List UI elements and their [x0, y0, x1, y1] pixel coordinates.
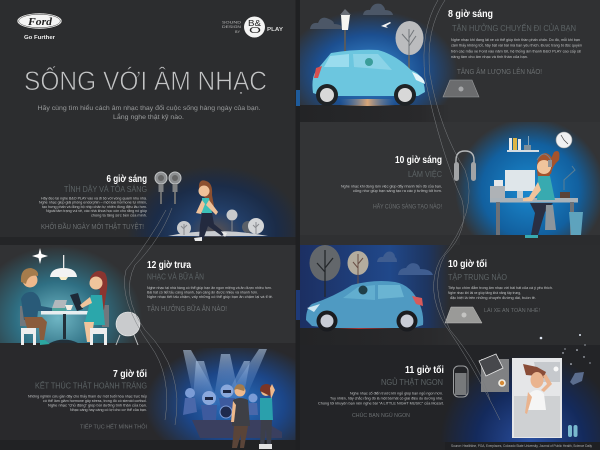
curved sound lines: [124, 0, 500, 425]
icon: clouds: [310, 4, 393, 29]
body text: 10 pm: Tiếp tục chìm đắm trong âm nhạc với bài hát của cá ý yêu thích.: [448, 285, 553, 290]
call to action: 7 pm: TIẾP TỤC HẾT MÌNH THÔI: [80, 424, 147, 430]
icon: round speaker: [116, 312, 140, 345]
logo: B&O Play: PLAY: [267, 27, 283, 33]
call to action: 6 am: KHỞI ĐẦU NGÀY MỚI THẬT TUYỆT!: [41, 221, 144, 231]
logo: B&O Play: [222, 16, 283, 38]
body text: 8 am: nâng tầm cho âm nhạc và tinh thần của bạn.: [451, 54, 528, 59]
illustration: band: [183, 384, 258, 420]
icon: headphones: [454, 151, 476, 181]
illustration: man at table: [20, 268, 52, 345]
body text: 6 am: Ngoài tâm trạng vui vẻ, các nhà khoa học còn cho rằng nó giúp: [46, 208, 147, 213]
panel: 8 am: [300, 0, 600, 122]
heading: 8 am: 8 giờ sáng: [448, 9, 493, 20]
panel: 10 am: [300, 122, 600, 245]
illustration: light blue car: [312, 50, 425, 106]
logo: Ford: Ford: [27, 16, 53, 28]
body text: 6 am: chúng ta tăng sức bền của mình.: [91, 212, 147, 217]
body text: noon: Nghe nhạc tại nhà hàng có thể giúp bạn ăn ngon miệng và ăn được nhiều hơn.: [147, 285, 272, 290]
heading: noon: 12 giờ trưa: [147, 260, 191, 271]
icon: plane: [381, 22, 391, 28]
icon: night trees: [310, 245, 368, 297]
illustration: audience woman: [259, 384, 275, 449]
icon: wall clock: [556, 132, 572, 148]
body text: 6 am: [39, 196, 147, 217]
illustration: blue car at night: [306, 281, 423, 332]
subtitle: Hãy cùng tìm hiểu cách âm nhạc thay đổi cuộc sống hàng ngày của bạn.: [38, 103, 261, 112]
illustration: audience man: [231, 384, 250, 448]
heading: 10 pm: 10 giờ tối: [448, 258, 487, 270]
illustration: woman at table: [80, 271, 109, 345]
panel: noon: [0, 245, 296, 348]
illustration: trees: [177, 210, 264, 235]
subheading: 10 am: LÀM VIỆC: [408, 170, 442, 179]
illustration: running woman: [194, 180, 227, 241]
body text: 10 pm: [448, 285, 553, 300]
body text: 11 pm: Chúng tôi khuyên bạn nên nghe bài "A LITTLE NIGHT MUSIC" của Mozart.: [318, 400, 444, 406]
logo: B&O Play: DESIGN: [222, 25, 242, 29]
logo: B&O Play: BY: [235, 30, 241, 34]
body text: 11 pm: Nghe nhạc cổ điển trước khi ngủ giúp bạn ngủ ngon hơn.: [350, 390, 443, 396]
illustration: bed with sleeping person: [512, 358, 562, 438]
subheading: wake up: TỈNH DẬY VÀ TỎA SÁNG: [64, 185, 147, 194]
body text: 7 pm: [28, 394, 147, 412]
call to action: 11 pm: CHÚC BẠN NGỦ NGON: [352, 412, 410, 419]
subtitle: [38, 103, 261, 121]
body text: 10 pm: đặc biệt là trên những chuyến đường dài, buồn tẻ.: [450, 295, 536, 300]
body text: 8 am: cảm thấy không tốt, hãy bật vài bài mà bạn yêu thích. Được trang bị độc quyền: [451, 43, 582, 48]
body text: 7 pm: Nhạc càng hay càng có lợi cho cơ thể của bạn.: [70, 407, 147, 412]
icon: portable speaker: [454, 366, 468, 397]
body text: 10 pm: Nghe nhạc khi lái xe giúp tăng khả năng tập trung,: [448, 290, 521, 295]
body text: noon: Bài hát có tiết tấu càng nhanh, bạn càng ăn được nhiều và nhanh hơn.: [147, 290, 258, 294]
logo: B&O Play: SOUND: [222, 20, 242, 24]
subheading: noon: NHẠC VÀ BỮA ĂN: [147, 272, 204, 282]
icon: earphones: [155, 172, 181, 204]
icon: night clouds: [377, 252, 433, 275]
illustration: desk and computer: [490, 166, 583, 235]
illustration: stage: [192, 420, 282, 438]
body text: 11 pm: [318, 390, 444, 406]
body text: 8 am: [451, 37, 582, 59]
call to action: 8 am: TĂNG ÂM LƯỢNG LÊN NÀO!: [457, 67, 542, 76]
icon: street lamp: [340, 9, 351, 58]
illustration: woman at desk: [523, 151, 559, 238]
icon: tree: [396, 21, 424, 72]
body text: 6 am: tạo hưng phấn và đồng bộ nhịp chân tự nhiên đồng điệu lâu hơn.: [42, 204, 147, 209]
title: SỐNG VỚI ÂM NHẠC: [24, 64, 267, 96]
column gutter: [296, 0, 300, 450]
body text: 10 am: [341, 184, 442, 193]
header: [17, 13, 283, 121]
panel: 6 am: [0, 0, 296, 245]
illustration: shelf: [507, 136, 539, 152]
heading: 7 pm: 7 giờ tối: [113, 368, 147, 380]
subheading: 8 am: TẬN HƯỞNG CHUYẾN ĐI CỦA BẠN: [452, 23, 576, 33]
illustration: stage spotlights: [183, 349, 267, 410]
icon: stars: [540, 334, 591, 365]
call to action: 10 am: HÃY CÙNG SÁNG TẠO NÀO!: [373, 204, 442, 210]
icon: ceiling lamp: [50, 255, 77, 280]
body text: 8 am: Nghe nhạc khi đang lái xe có thể giúp tinh thần phấn chấn. Do đó, mỗi khi bạn: [451, 37, 580, 42]
call to action: noon: TẬN HƯỞNG BỮA ĂN NÀO!: [147, 304, 227, 313]
heading: 11 pm: 11 giờ tối: [405, 364, 444, 376]
icon: rocket: [570, 372, 584, 385]
body text: 8 am: trên các mẫu xe Ford vào năm tới, hệ thống âm thanh B&O PLAY cao cấp sẽ: [451, 48, 581, 54]
body text: 7 pm: Nghe nhạc "chủ động" giúp bồi dưỡng tình thân của bạn.: [48, 402, 147, 408]
icon: car speaker night: [445, 307, 482, 323]
body text: 6 am: Hãy đeo tai nghe B&O PLAY vào và đi bộ với vòng quanh khu nhà.: [41, 196, 147, 200]
body text: 10 am: cũng như giúp bạn sáng tạo ra các ý tưởng tốt hơn.: [353, 188, 442, 193]
tagline: Go Further: Go Further: [24, 35, 56, 41]
body text: noon: Nghe nhạc tiết tấu chậm, vấy những có thể giúp bạn ăn chậm lại và tỉ tê.: [147, 294, 273, 299]
icon: slippers: [568, 425, 578, 437]
body text: 7 pm: Những nghiên cứu gần đây cho thấy tham dự một buổi hòa nhạc trực tiếp: [28, 394, 147, 398]
body text: 7 pm: có thể làm giảm hormone gây stress, trong đó có steroid cortisol.: [43, 398, 147, 403]
subheading: 11 pm: NGỦ THẬT NGON: [381, 378, 443, 387]
footer sources: Source: Healthline, PGA, Everplaces, Colorado State University, Journal of Public Health, Science Daily: [451, 444, 592, 448]
body text: noon: [147, 285, 273, 299]
body text: 10 am: Nghe nhạc khi đang làm việc giúp đẩy nhanh tiến độ của bạn,: [341, 184, 442, 188]
panel: 11 pm: [300, 334, 600, 450]
body text: 11 pm: Tuy nhiên, hãy chắc rằng đó là một bài hát có giai điệu du dương nhé.: [330, 396, 443, 400]
icon: car speaker: [443, 80, 479, 97]
panel: 7 pm: [0, 348, 296, 450]
logo: B&O Play: B&: [248, 19, 262, 28]
logo: Ford: [17, 13, 62, 29]
illustration: bedside table: [479, 354, 509, 392]
subtitle: Lắng nghe thật kỹ nào.: [113, 112, 184, 121]
heading: 10 am: 10 giờ sáng: [395, 155, 442, 166]
subheading: 7 pm: KẾT THÚC THẬT HOÀNH TRÁNG: [35, 380, 147, 390]
heading: 6 am: 6 giờ sáng: [106, 174, 147, 185]
subheading: 10 pm: TẬP TRUNG NÀO: [448, 273, 507, 282]
panel: 10 pm: [300, 245, 600, 345]
illustration: cafe table: [41, 293, 91, 343]
logo: B&O Play: O: [249, 26, 261, 35]
call to action: 10 pm: LÁI XE AN TOÀN NHÉ!: [484, 307, 540, 314]
icon: sparkle light: [32, 248, 48, 264]
body text: 6 am: Nghe nhạc giúp giải phóng endorphin – một loại hormone tự nhiên,: [39, 200, 147, 205]
